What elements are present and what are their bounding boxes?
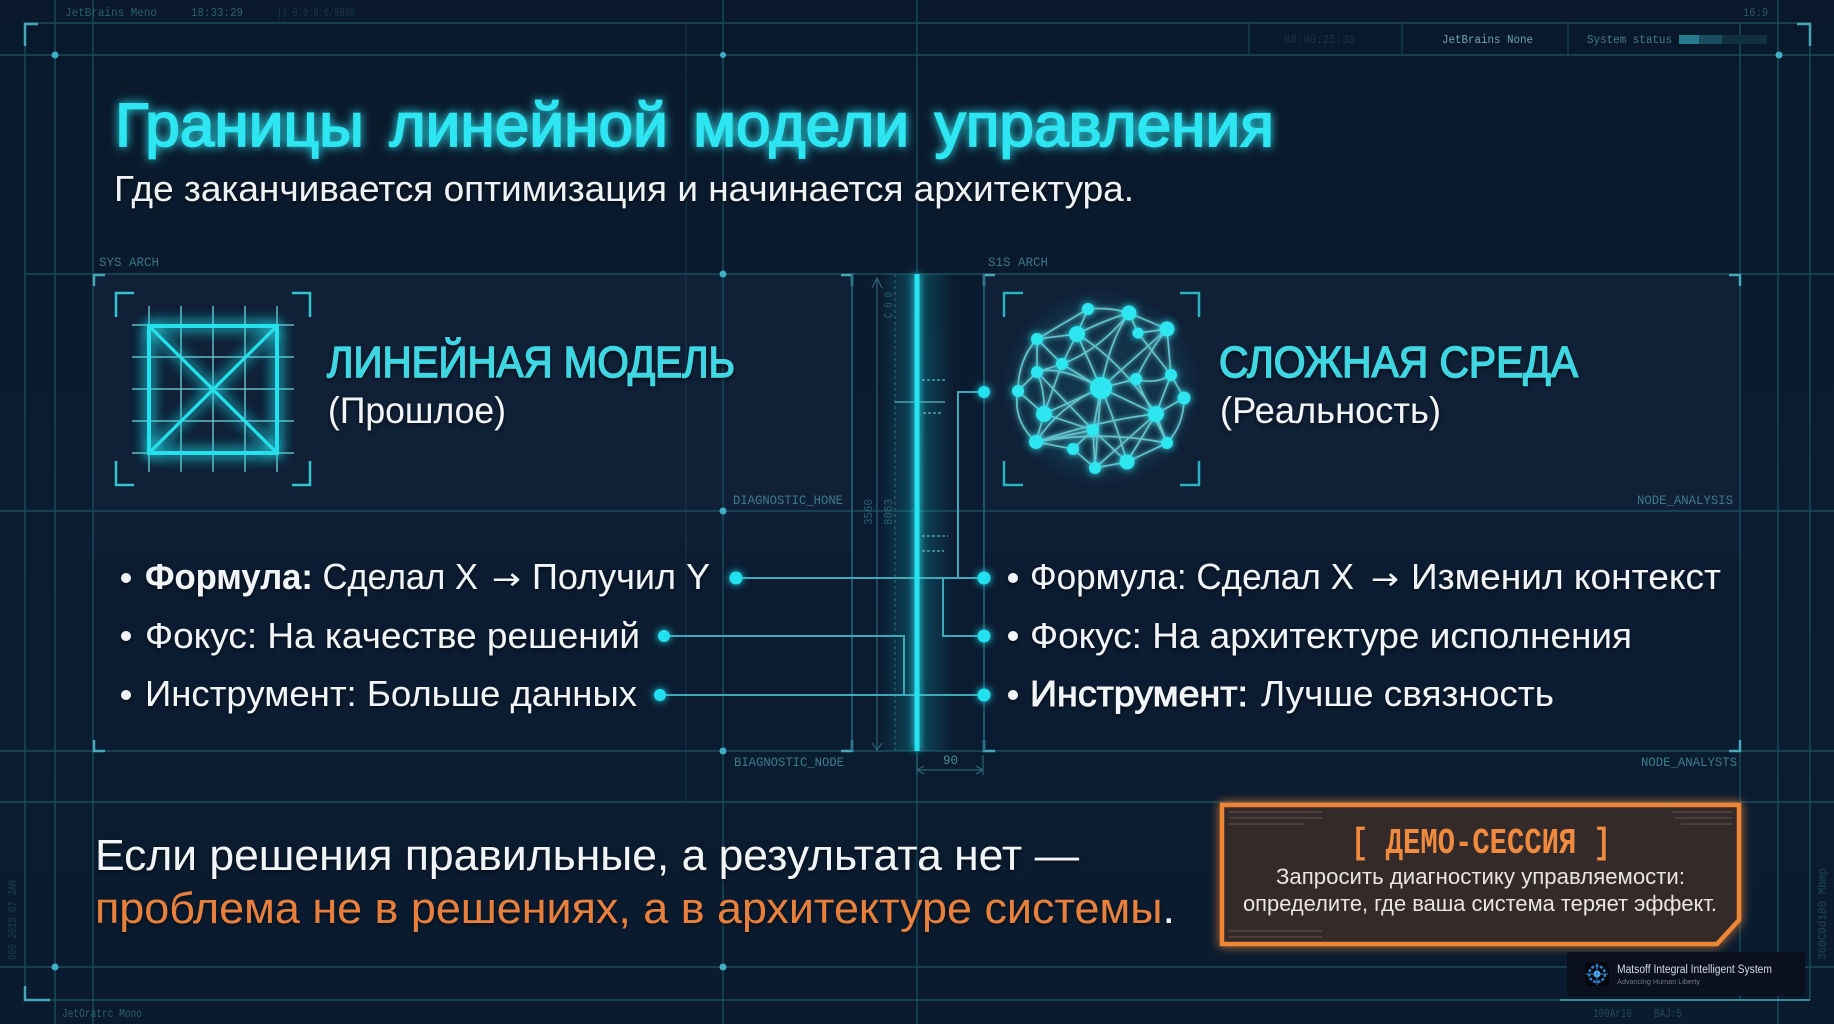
central divider glow	[880, 274, 954, 751]
top status text left: 18:33:29	[191, 7, 243, 20]
top status bar right	[1284, 7, 1768, 47]
callout body: Запросить диагностику управляемости:	[1276, 864, 1685, 889]
bottom status text: 100Ar10	[1593, 1008, 1632, 1021]
conclusion text	[95, 831, 1175, 933]
small tick arrows	[895, 380, 948, 551]
dimension guides	[872, 274, 983, 775]
list: complex environment: Фокус: На архитектуре исполнения	[1030, 615, 1632, 656]
list: linear model: Инструмент: Больше данных	[145, 673, 637, 714]
panel: left background	[93, 274, 852, 751]
node labels lower: BIAGNOSTIC_NODE	[734, 756, 844, 770]
conclusion text: Если решения правильные, а результата нет —	[95, 831, 1079, 880]
bottom status text: BAJ:5	[1654, 1008, 1682, 1021]
node labels lower: NODE_ANALYSTS	[1641, 756, 1737, 770]
logo badge	[1567, 952, 1805, 996]
list: complex environment: Инструмент:	[1030, 673, 1248, 714]
panel label: right: S1S ARCH	[988, 256, 1048, 270]
logo tagline: Advancing Human Liberty	[1617, 977, 1700, 986]
callout heading: [ ДЕМО-СЕССИЯ ]	[1351, 823, 1611, 864]
top status bar right: 16:9	[1743, 7, 1768, 20]
callout body: определите, где ваша система теряет эффект.	[1243, 891, 1717, 916]
connector nodes	[654, 386, 990, 702]
list: complex environment: Изменил контекст	[1411, 556, 1721, 597]
list: linear model: Фокус: На качестве решений	[145, 615, 640, 656]
logo name: Matsoff Integral Intelligent System	[1617, 964, 1772, 976]
vertical margin text right: 360C0d100 Mbmp	[1817, 868, 1830, 960]
list: linear model: →	[492, 562, 521, 597]
icon: logo gear	[1585, 962, 1609, 986]
vertical margin text left: 0G0 2019 07 JAN	[7, 880, 20, 960]
list: linear model: Формула: Сделал X	[145, 556, 478, 597]
top status bar right: 88:00:25:38	[1284, 34, 1355, 47]
callout: demo session	[1222, 805, 1739, 944]
icon: linear grid	[116, 293, 310, 485]
connector lines between lists	[660, 392, 984, 695]
vertical dimension labels: 8063	[883, 499, 896, 525]
list: complex environment: Формула: Сделал X	[1030, 556, 1354, 597]
node labels upper	[733, 494, 1733, 508]
panel: right background	[983, 274, 1741, 751]
dimension label: 90: 90	[943, 754, 958, 768]
heading: linear model: ЛИНЕЙНАЯ МОДЕЛЬ	[327, 336, 735, 387]
vertical dimension labels: 3560	[863, 499, 876, 525]
subheading: reality: (Реальность)	[1220, 390, 1441, 431]
bottom status text: JetOratrc Mono	[62, 1008, 142, 1021]
central divider line	[914, 274, 920, 751]
node labels upper: NODE_ANALYSIS	[1637, 494, 1733, 508]
list: linear model	[121, 556, 710, 714]
title: Границы линейной модели управления	[115, 91, 1274, 159]
top status text left: || 0:0:0:0/8888	[277, 7, 355, 20]
list: complex environment	[1008, 556, 1721, 714]
list: complex environment: →	[1371, 562, 1399, 597]
vertical dimension labels: C 0 0	[883, 292, 896, 318]
top status text left	[65, 7, 355, 20]
panel label: left: SYS ARCH	[99, 256, 159, 270]
node labels lower	[734, 756, 1737, 770]
panel side line left	[852, 274, 984, 751]
icon: network	[1001, 288, 1201, 488]
subtitle: Где заканчивается оптимизация и начинается архитектура.	[114, 168, 1134, 209]
list: linear model: Получил Y	[532, 556, 710, 597]
bottom status text	[62, 1008, 1682, 1021]
list: complex environment: Лучше связность	[1261, 673, 1554, 714]
callout micro text decor	[1229, 811, 1732, 938]
top status text left: JetBrains Meno	[65, 7, 157, 20]
node labels upper: DIAGNOSTIC_HONE	[733, 494, 843, 508]
subheading: past: (Прошлое)	[328, 390, 506, 431]
top status bar right: JetBrains None	[1442, 34, 1533, 47]
heading: complex environment: СЛОЖНАЯ СРЕДА	[1219, 338, 1579, 387]
conclusion text: проблема не в решениях, а в архитектуре системы .	[95, 884, 1175, 933]
vertical dimension labels	[863, 292, 896, 525]
panel corner brackets	[94, 275, 1740, 751]
top status bar right: System status	[1587, 34, 1672, 47]
callout body	[1243, 864, 1717, 916]
